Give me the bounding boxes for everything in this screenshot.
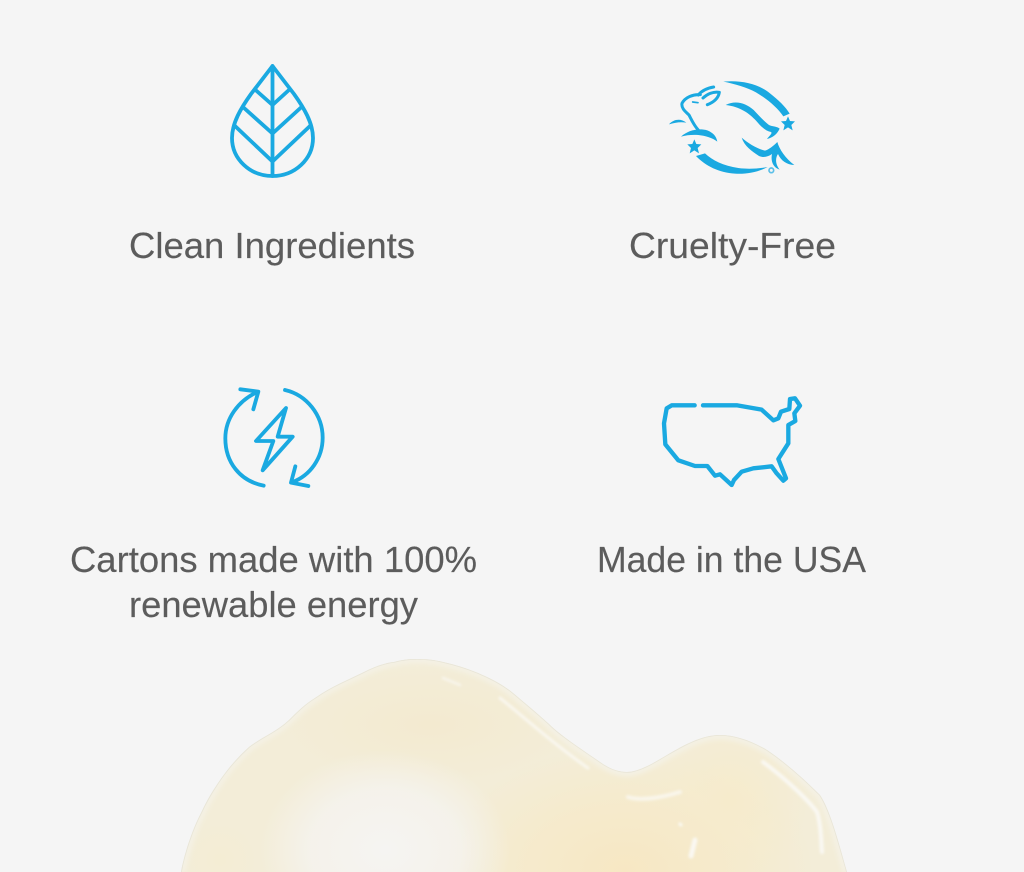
label: cartons made with renewable energy: [70, 539, 477, 625]
label: cartons made with renewable energy: renewable energy: [129, 584, 418, 625]
icon: leaping rabbit: [669, 81, 795, 174]
panel: renewable energy: [70, 389, 477, 625]
icon: energy cycle with bolt: [225, 389, 323, 486]
label: cruelty-free: Cruelty-Free: [629, 225, 836, 266]
icon: usa outline: [664, 398, 800, 485]
panel: clean ingredients: [129, 66, 415, 266]
icon: leaf drop: [232, 66, 313, 176]
product swatch: cream blob: [170, 650, 860, 872]
label: cartons made with renewable energy: Cartons made with 100%: [70, 539, 477, 580]
label: clean ingredients: Clean Ingredients: [129, 225, 415, 266]
label: made in the usa: Made in the USA: [597, 539, 866, 580]
panel: made in the usa: [597, 398, 866, 580]
panel: cruelty-free: [629, 81, 836, 266]
